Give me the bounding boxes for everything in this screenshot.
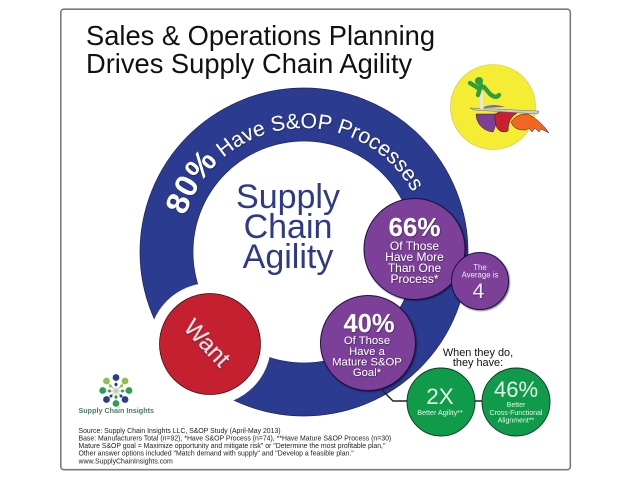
callout: when they do (443, 347, 513, 369)
circle: 66%: Process* (390, 272, 439, 286)
logo: Supply Chain Insights: Supply Chain Insights (78, 406, 154, 415)
ring: 80% have S&OP processes (140, 88, 468, 416)
ring label: 80% Have S&OP Processes (166, 113, 422, 214)
circle: average is 4: Average is (462, 270, 498, 280)
circle: 66%: 66% (388, 212, 441, 242)
source notes: Mature S&OP goal = Maximize opportunity and mitigate risk" or "Determine the most profitable plan," (78, 443, 386, 450)
circle: 66%: Have More (385, 250, 444, 264)
center label: Supply Chain Agility: Agility (243, 238, 333, 276)
circle: average is 4: 4 (473, 280, 485, 303)
source notes: Other answer options included "Match demand with supply" and "Develop a feasible plan." (78, 450, 354, 458)
circle: 40%: Goal* (353, 367, 382, 379)
source notes (78, 428, 391, 466)
callout: when they do: they have: (453, 357, 503, 369)
circle: 46% alignment: Alignment** (498, 418, 535, 424)
source notes: Base: Manufacturers Total (n=92), *Have S&OP Process (n=74), **Have Mature S&OP Process (n=30) (78, 436, 391, 442)
circle: average is 4 (452, 252, 508, 310)
circle: 66% (364, 198, 465, 300)
source notes: www.SupplyChainInsights.com (78, 458, 173, 466)
circle: Want: Want (178, 314, 236, 373)
circle: 46% alignment: Better (507, 402, 526, 409)
panel: frame (61, 9, 570, 470)
circle: 2X better agility (407, 368, 475, 436)
circle: 40%: Of Those (344, 335, 390, 347)
title: Drives Supply Chain Agility (86, 48, 413, 79)
circle: 40%: 40% (343, 310, 395, 338)
icon: surfer mascot (450, 64, 549, 150)
circle: 66%: Than One (388, 261, 442, 275)
circle: 40% (320, 296, 416, 390)
circle: 40%: Mature S&OP (332, 356, 402, 368)
connector line (382, 390, 482, 401)
title: Sales & Operations Planning (86, 20, 435, 51)
center label: Supply Chain Agility (236, 178, 340, 276)
circle: average is 4: The (473, 263, 487, 272)
circle: Want (160, 294, 260, 394)
circle: 46% alignment (482, 368, 550, 436)
circle: 46% alignment: 46% (494, 377, 538, 402)
center label: Supply Chain Agility: Chain (244, 208, 332, 246)
circle: 2X better agility: 2X (426, 384, 454, 409)
center label: Supply Chain Agility: Supply (236, 178, 340, 216)
logo: Supply Chain Insights (78, 374, 154, 415)
circle: 66%: Of Those (390, 239, 439, 253)
source notes: Source: Supply Chain Insights LLC, S&OP Study (April-May 2013) (78, 428, 281, 435)
circle: 40%: Have a (349, 346, 386, 358)
title (86, 20, 435, 79)
callout: when they do: When they do, (443, 347, 513, 359)
circle: 46% alignment: Cross-Functional (490, 410, 543, 417)
circle: 2X better agility: Better Agility** (417, 408, 463, 417)
